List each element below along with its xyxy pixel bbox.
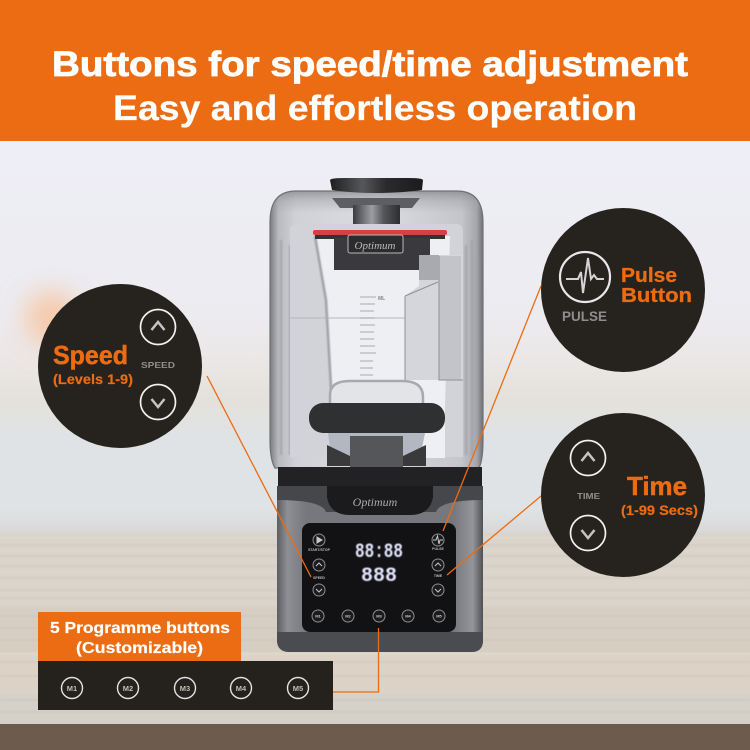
connector: time — [447, 496, 541, 575]
pulse title: Pulse — [621, 264, 677, 287]
programme button strip: M2 — [123, 684, 133, 693]
time range: (1-99 Secs) — [621, 502, 698, 518]
panel programme labels: M2 — [345, 614, 352, 618]
brand mark: Optimum — [353, 495, 398, 509]
time label: TIME — [577, 491, 600, 501]
programme button strip: M1 — [67, 684, 77, 693]
panel programme labels: M3 — [376, 614, 383, 618]
panel labels: TIME — [434, 574, 443, 578]
panel programme labels: M1 — [315, 614, 322, 618]
time up icon — [570, 440, 606, 476]
panel: speed — [38, 284, 202, 448]
blender — [270, 178, 483, 652]
brand recess — [327, 486, 433, 515]
background wall — [0, 141, 750, 533]
connector: speed — [207, 376, 311, 577]
measure scale — [360, 296, 385, 375]
panel programme labels: M4 — [405, 614, 412, 618]
wooden table — [0, 533, 750, 750]
heading line 1: Buttons for speed/time adjustment — [52, 45, 688, 84]
display: 888 — [361, 565, 397, 588]
speed label: SPEED — [141, 360, 175, 370]
programme heading: (Customizable) — [76, 640, 203, 657]
pulse label: PULSE — [562, 309, 607, 324]
speed title: Speed — [53, 340, 128, 370]
programme button strip — [38, 661, 333, 710]
heading line 2: Easy and effortless operation — [113, 89, 637, 128]
pulse icon — [560, 252, 610, 302]
speed up icon — [140, 310, 176, 344]
panel labels: START/STOP — [308, 548, 331, 552]
time title: Time — [627, 471, 687, 501]
blender body — [277, 486, 483, 652]
blender black collar — [278, 467, 482, 486]
speed range: (Levels 1-9) — [53, 371, 133, 387]
programme button strip: M4 — [236, 684, 247, 693]
jar dark label band — [334, 238, 430, 270]
panel button glyphs — [316, 536, 443, 592]
jar base — [327, 433, 426, 468]
connector: programme — [333, 628, 378, 692]
jar red band — [313, 230, 447, 235]
measure scale: ML — [378, 296, 385, 302]
time down icon — [570, 516, 606, 550]
panel programme labels — [315, 614, 443, 618]
panel: programme buttons — [38, 612, 333, 710]
control panel — [302, 523, 456, 632]
speed down icon — [140, 384, 176, 420]
jar water line — [290, 317, 417, 319]
pulse title — [621, 264, 692, 307]
jar logo plate: Optimum — [355, 240, 396, 252]
panel buttons — [312, 534, 445, 622]
jar logo plate — [348, 235, 403, 253]
panel labels: SPEED — [313, 576, 325, 580]
panel programme labels: M5 — [436, 614, 443, 618]
display: 88:88 — [355, 541, 403, 564]
panel: pulse — [541, 208, 705, 372]
jar — [290, 224, 463, 458]
panel: time — [541, 413, 705, 577]
programme heading — [38, 612, 241, 661]
jar handle — [330, 381, 423, 404]
programme heading: 5 Programme buttons — [50, 620, 230, 637]
dark table edge — [0, 724, 750, 750]
side shading — [281, 240, 472, 455]
panel labels — [308, 547, 444, 580]
blender lid — [330, 178, 423, 224]
header banner — [0, 0, 750, 141]
pulse title: Button — [621, 284, 692, 307]
display — [355, 541, 403, 588]
programme button strip: M3 — [180, 684, 190, 693]
jar rubber collar — [309, 403, 445, 433]
jar spout — [405, 255, 463, 394]
connector: pulse — [443, 286, 541, 531]
panel labels: PULSE — [432, 547, 444, 551]
sound enclosure — [270, 191, 483, 468]
programme button strip: M5 — [293, 684, 303, 693]
